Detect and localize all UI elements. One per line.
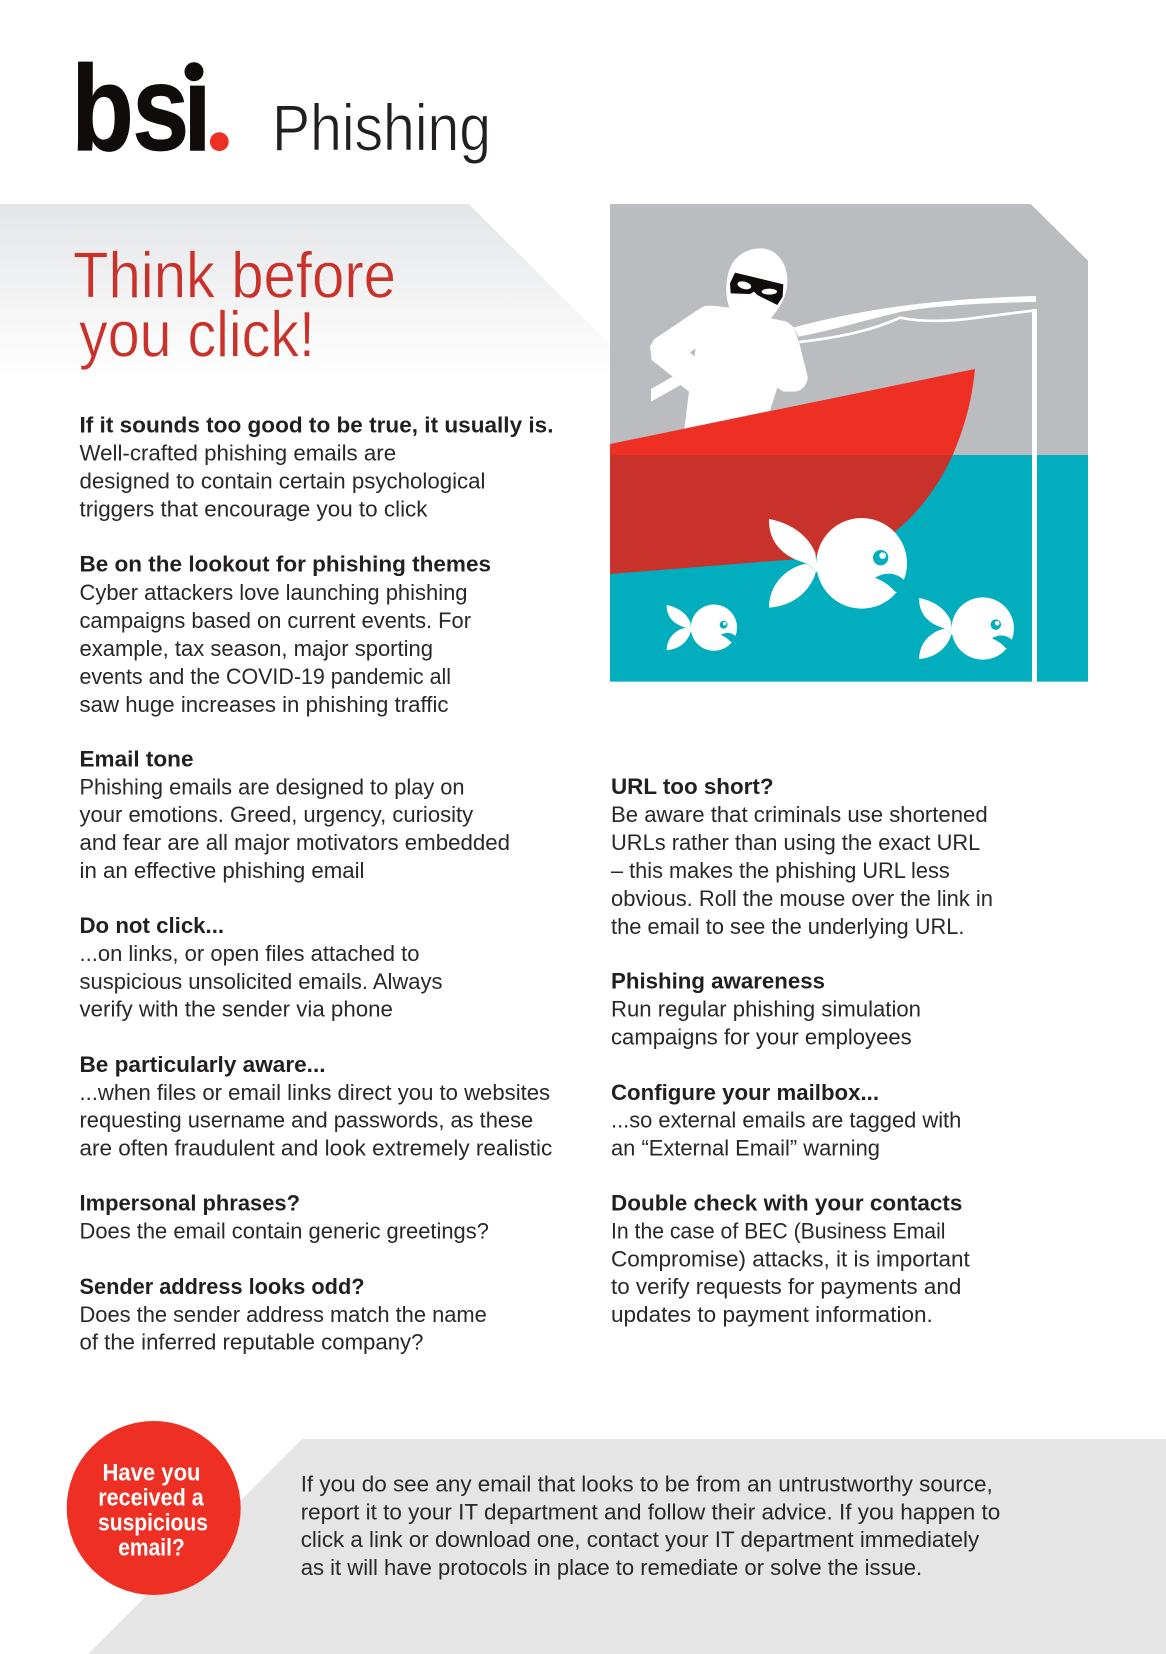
tip: be particularly aware: ...when files or email links direct you to websites: [80, 1080, 550, 1105]
tip: impersonal phrases: [80, 1190, 489, 1244]
tip: sender address: of the inferred reputable company?: [80, 1330, 424, 1354]
tip: phishing awareness: Run regular phishing simulation: [611, 996, 921, 1022]
tip: double check with contacts: to verify requests for payments and: [611, 1274, 961, 1299]
tip: sender address: Sender address looks odd?: [80, 1274, 364, 1299]
tip: phishing themes: Cyber attackers love launching phishing: [80, 580, 468, 605]
tip: email tone: Email tone: [80, 746, 194, 772]
tip: double check with contacts: updates to payment information.: [611, 1302, 933, 1327]
tip: sender address: [80, 1274, 487, 1354]
callout: red circle: email?: [118, 1535, 185, 1562]
text block: bottom advice: If you do see any email that looks to be from an untrustworthy source,: [301, 1472, 993, 1496]
tip: email tone: and fear are all major motivators embedded: [80, 830, 510, 855]
tip: phishing themes: events and the COVID-19 pandemic all: [80, 664, 451, 689]
water: [610, 455, 1088, 682]
tip: too good to be true: Well-crafted phishing emails are: [80, 441, 396, 466]
tip: phishing themes: Be on the lookout for phishing themes: [80, 552, 491, 577]
tip: configure mailbox: ...so external emails are tagged with: [611, 1108, 961, 1132]
tip: double check with contacts: Double check with your contacts: [611, 1190, 962, 1216]
tip: URL too short: URLs rather than using the exact URL: [611, 830, 980, 855]
tip: do not click: verify with the sender via phone: [80, 996, 393, 1022]
tip: phishing themes: [80, 552, 491, 717]
callout: red circle: received a: [98, 1485, 204, 1512]
tip: phishing awareness: Phishing awareness: [611, 968, 825, 994]
tip: email tone: your emotions. Greed, urgency, curiosity: [80, 802, 474, 827]
tip: URL too short: – this makes the phishing URL less: [611, 858, 950, 883]
title: Think before you click!: [73, 239, 396, 371]
tip: sender address: Does the sender address match the name: [80, 1302, 487, 1327]
tip: be particularly aware: are often fraudulent and look extremely realistic: [80, 1136, 552, 1160]
tip: too good to be true: designed to contain certain psychological: [80, 469, 486, 494]
tip: configure mailbox: an “External Email” warning: [611, 1136, 880, 1160]
icon: small fish: [667, 604, 739, 651]
fishing rod and line: [794, 296, 1037, 682]
tip: email tone: [80, 746, 510, 883]
tip: too good to be true: If it sounds too good to be true, it usually is.: [80, 413, 554, 438]
tip: email tone: Phishing emails are designed to play on: [80, 774, 464, 800]
title: Think before you click!: Think before: [73, 239, 396, 312]
left column text: [80, 413, 554, 1354]
illustration: phisher in a boat fishing: [610, 204, 1088, 682]
icon: big fish: [769, 518, 911, 609]
tip: impersonal phrases: Does the email contain generic greetings?: [80, 1218, 489, 1244]
tip: URL too short: the email to see the underlying URL.: [611, 914, 964, 939]
tip: do not click: suspicious unsolicited emails. Always: [80, 969, 442, 994]
callout: red circle: [67, 1421, 241, 1595]
tip: do not click: ...on links, or open files attached to: [80, 941, 420, 966]
tip: phishing themes: example, tax season, major sporting: [80, 636, 433, 661]
tip: double check with contacts: Compromise) attacks, it is important: [611, 1246, 971, 1272]
callout: red circle: Have you: [102, 1460, 200, 1487]
panel: bottom grey band: [88, 1439, 1166, 1654]
tip: URL too short: [611, 774, 993, 939]
panel: top gradient background: [0, 204, 640, 375]
tip: double check with contacts: [611, 1190, 971, 1327]
text block: bottom advice: [301, 1472, 1000, 1580]
right column text: [611, 774, 993, 1327]
figure: masked phisher: [650, 248, 808, 429]
tip: URL too short: Be aware that criminals use shortened: [611, 802, 988, 827]
text block: bottom advice: click a link or download one, contact your IT department immediately: [301, 1527, 980, 1552]
callout: red circle: suspicious: [98, 1510, 208, 1537]
icon: black mask: [730, 273, 783, 305]
tip: URL too short: obvious. Roll the mouse over the link in: [611, 886, 993, 911]
logo: bsi: bsi: [71, 40, 212, 176]
tip: double check with contacts: In the case of BEC (Business Email: [611, 1218, 946, 1244]
tip: do not click: Do not click...: [80, 913, 224, 938]
tip: configure mailbox: [611, 1080, 961, 1160]
tip: phishing themes: campaigns based on current events. For: [80, 608, 471, 633]
text block: bottom advice: as it will have protocols in place to remediate or solve the issue.: [301, 1555, 922, 1580]
title: Think before you click!: you click!: [79, 298, 315, 371]
tip: be particularly aware: requesting username and passwords, as these: [80, 1108, 533, 1132]
tip: too good to be true: triggers that encourage you to click: [80, 496, 428, 522]
tip: too good to be true: [80, 413, 554, 522]
icon: medium fish: [919, 597, 1016, 660]
tip: URL too short: URL too short?: [611, 774, 774, 799]
tip: phishing themes: saw huge increases in phishing traffic: [80, 692, 448, 717]
tip: impersonal phrases: Impersonal phrases?: [80, 1190, 300, 1216]
sky: [610, 204, 1088, 455]
tip: email tone: in an effective phishing email: [80, 858, 364, 883]
text block: bottom advice: report it to your IT department and follow their advice. If you happen to: [301, 1500, 1000, 1524]
tip: do not click: [80, 913, 442, 1022]
tip: configure mailbox: Configure your mailbox...: [611, 1080, 879, 1105]
tip: phishing awareness: campaigns for your employees: [611, 1024, 912, 1050]
heading: Phishing: Phishing: [272, 91, 491, 165]
tip: be particularly aware: Be particularly aware...: [80, 1052, 326, 1077]
tip: phishing awareness: [611, 968, 921, 1050]
boat hull: [610, 369, 975, 574]
tip: be particularly aware: [80, 1052, 552, 1160]
